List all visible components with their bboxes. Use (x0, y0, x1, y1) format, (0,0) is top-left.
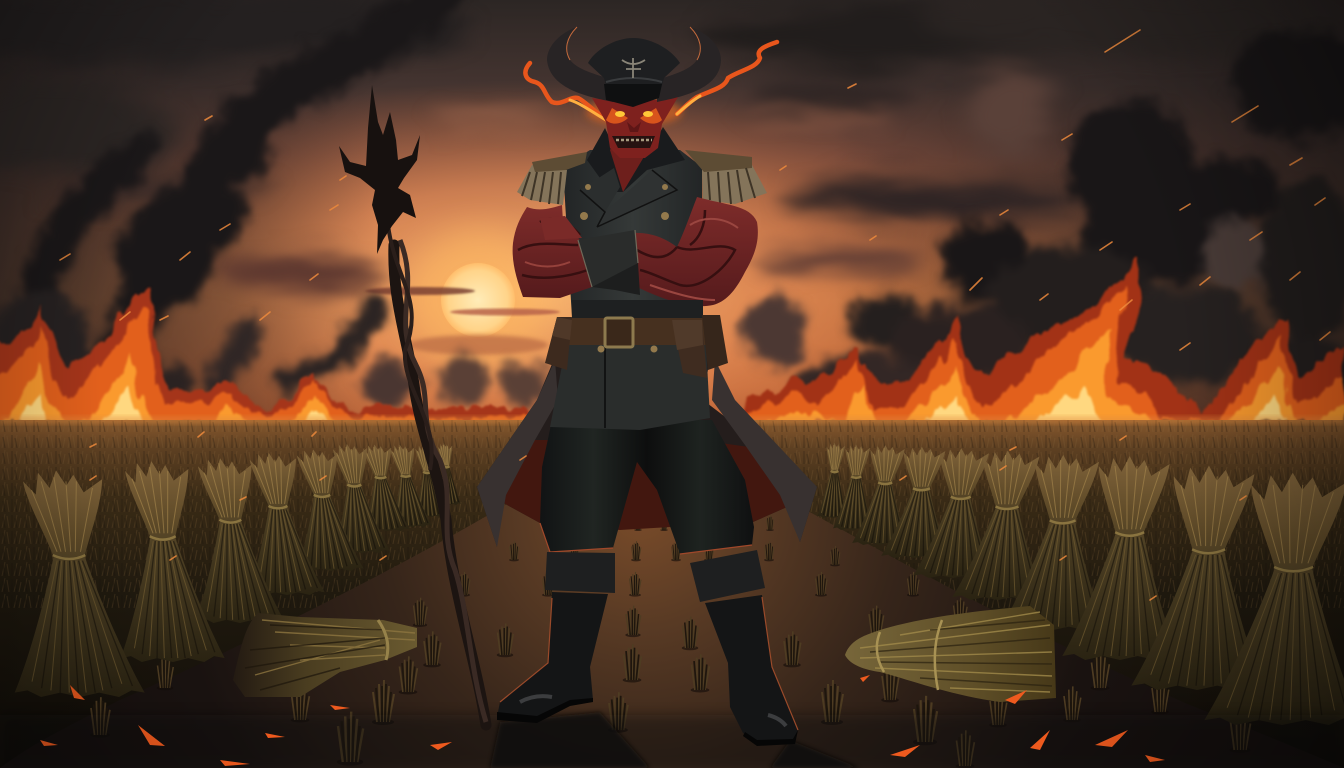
pouch right (672, 315, 728, 378)
ground embers (40, 675, 1165, 766)
staff head (339, 85, 420, 254)
smoke plumes right (743, 30, 1344, 415)
straw sheaves right (817, 443, 1344, 725)
bracer (578, 230, 640, 295)
officer cap (588, 38, 680, 107)
flames from horns (525, 42, 777, 126)
left boot (497, 552, 615, 723)
flying embers (60, 30, 1330, 600)
left epaulette (517, 152, 587, 205)
trousers (540, 420, 754, 554)
flames left (0, 285, 530, 424)
coat (477, 345, 817, 547)
sky background (0, 0, 1344, 430)
foreground ground shadow (0, 712, 1344, 768)
rice field (0, 416, 1344, 768)
sun (365, 230, 560, 370)
fallen sheaf left (233, 613, 417, 697)
pouch left (545, 317, 572, 370)
face (592, 97, 678, 158)
left-side arm (513, 205, 592, 298)
vest (563, 127, 703, 352)
fallen sheaf right (845, 606, 1056, 702)
smoke plumes left (0, 0, 547, 413)
horns (547, 27, 721, 102)
flames right (735, 255, 1344, 424)
right-side arm (633, 197, 758, 306)
soil rows (0, 490, 1344, 768)
tunic skirt (550, 345, 710, 430)
straw sheaves left (0, 443, 461, 697)
right boot (690, 550, 798, 746)
rice stubble rows (90, 515, 1250, 768)
dark storm clouds (0, 0, 1340, 292)
right epaulette (685, 150, 767, 204)
staff (339, 85, 486, 725)
belt and pouches (545, 300, 728, 378)
